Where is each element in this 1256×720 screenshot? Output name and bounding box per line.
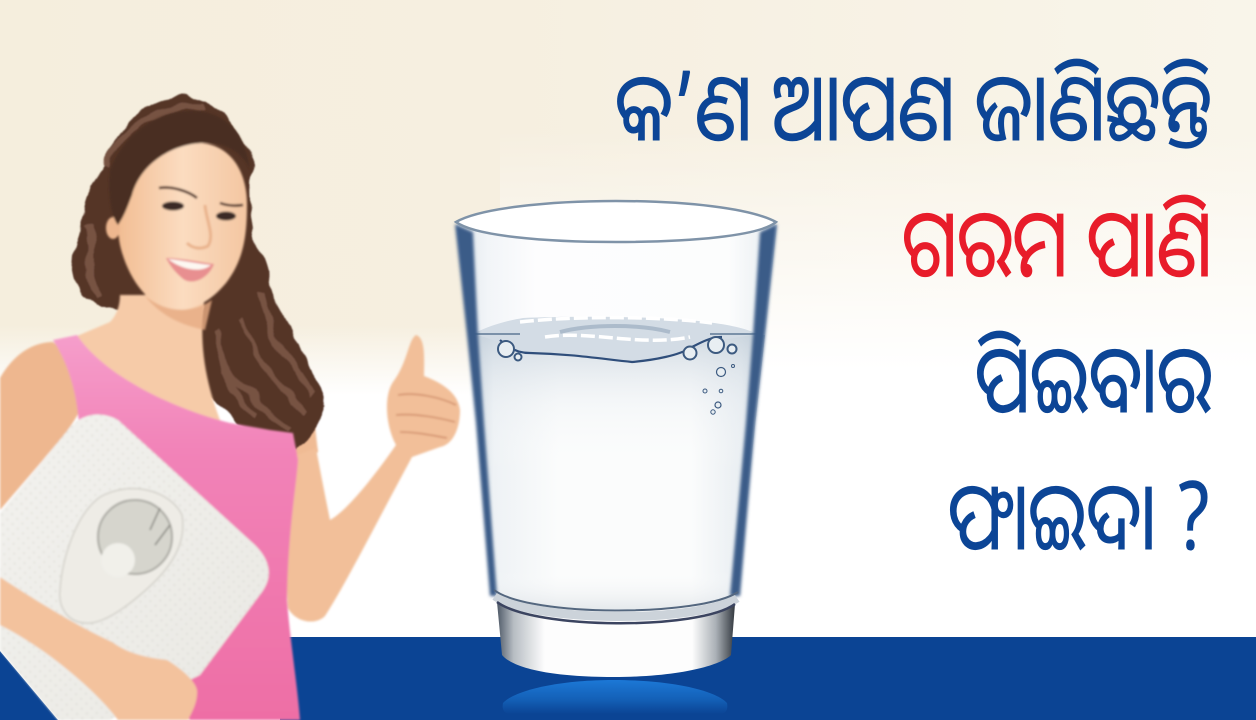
- photo: woman with scale: [0, 97, 460, 720]
- woman jaw shadow: [145, 296, 212, 330]
- scale dial: [98, 500, 172, 574]
- woman face: [118, 143, 247, 310]
- woman pink top: [53, 335, 300, 720]
- glass right wall: [730, 224, 777, 596]
- woman left arm: [0, 342, 82, 510]
- woman front hair over face: [109, 111, 250, 225]
- woman right shoulder: [260, 335, 318, 462]
- woman hair strands: [88, 108, 310, 430]
- woman brows: [159, 188, 243, 206]
- woman ear: [106, 217, 120, 239]
- glass rim: [456, 201, 776, 242]
- glass of water: [455, 201, 777, 714]
- scale dial plate: [60, 489, 183, 623]
- glass reflection: [503, 680, 727, 714]
- scale dial knob: [101, 543, 135, 577]
- glass base: [497, 602, 735, 677]
- glass bottom curves: [495, 596, 737, 617]
- woman lower arm and hand: [0, 577, 197, 720]
- glass bubbles: [498, 337, 736, 414]
- woman eyes: [162, 202, 184, 210]
- glass water surface: [473, 317, 757, 362]
- woman nose shadow: [187, 205, 211, 248]
- woman hair back: [75, 97, 325, 450]
- woman right arm and thumb-up hand: [287, 335, 460, 622]
- glass body above water: [456, 225, 777, 336]
- woman neck and chest: [77, 295, 222, 425]
- glass left wall: [455, 224, 497, 596]
- blue floor band: [0, 637, 1256, 720]
- heading: [615, 40, 1212, 577]
- glass water column: [470, 335, 765, 611]
- woman mouth: [166, 258, 214, 282]
- bathroom scale: [0, 415, 269, 720]
